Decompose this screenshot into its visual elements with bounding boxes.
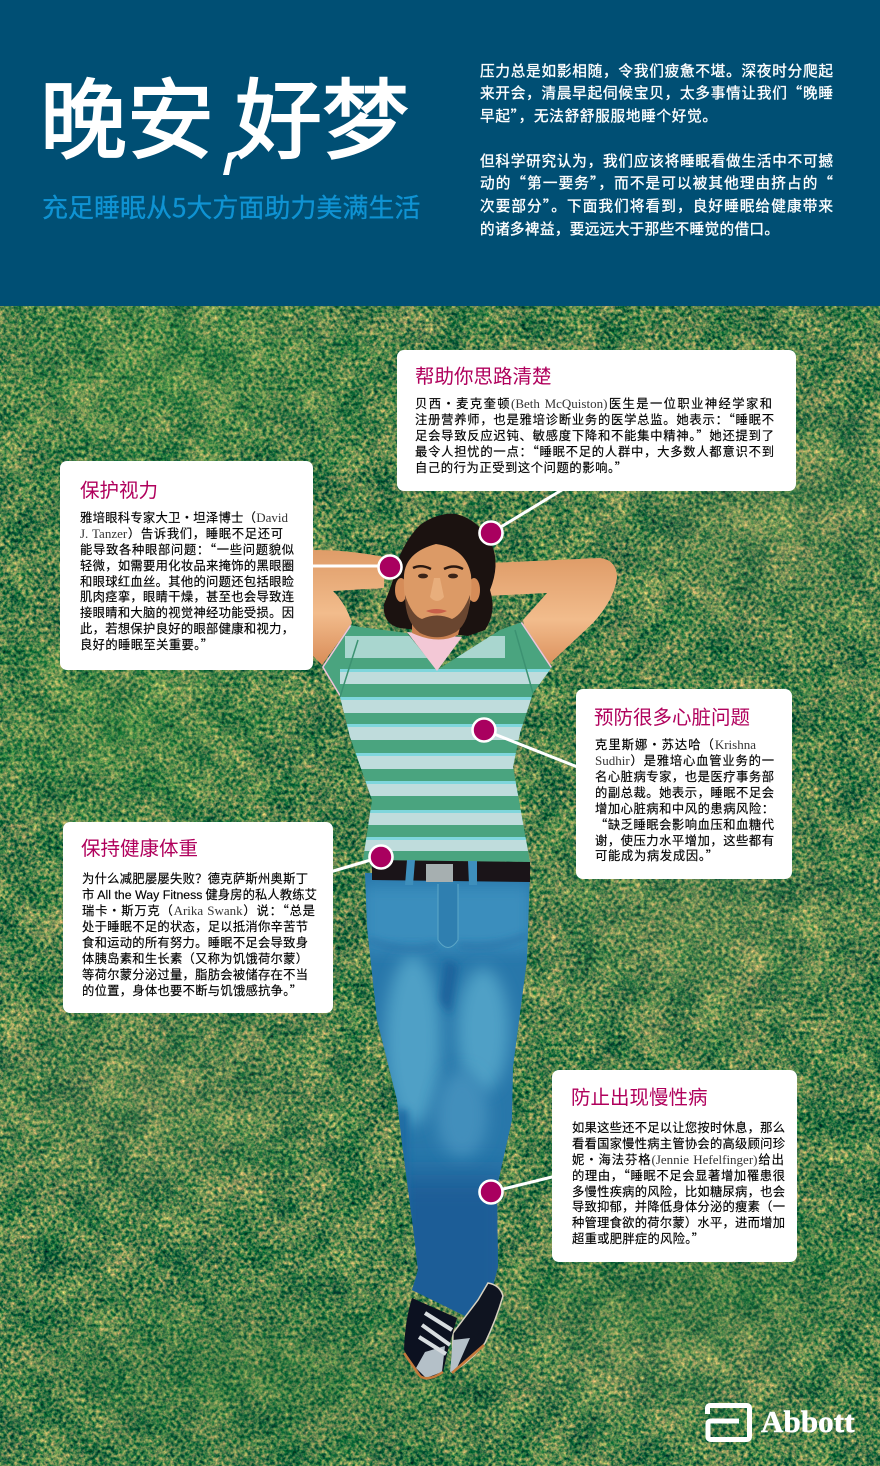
body text: clear thinking: [415, 394, 774, 476]
body text: healthy weight: 瑞卡·斯万克（Arika Swank）说：“总是: [82, 901, 315, 919]
right arm: [488, 558, 617, 670]
heading: clear thinking: 帮助你思路清楚: [415, 360, 552, 389]
body text: heart: 可能成为病发成因。”: [595, 846, 718, 864]
body text: chronic disease: 超重或肥胖症的风险。”: [572, 1229, 704, 1247]
body text: protect vision: 良好的睡眠至关重要。”: [80, 635, 213, 653]
body text: protect vision: 此，若想保护良好的眼部健康和视力，: [80, 619, 294, 637]
body text: healthy weight: 食和运动的所有努力。睡眠不足会导致身: [82, 933, 308, 951]
body text: heart: 克里斯娜·苏达哈（Krishna: [595, 735, 756, 753]
left arm: [313, 550, 384, 665]
panel: healthy weight: [63, 822, 333, 1013]
body text: clear thinking: 贝西·麦克奎顿(Beth McQuiston)医生是一位职业神经学家和: [415, 394, 772, 412]
man lying on the grass: [313, 514, 617, 1380]
undershirt collar: [407, 632, 462, 671]
marker: eyes: [378, 556, 402, 578]
logo: Abbott: [705, 1403, 855, 1442]
left shoe: [404, 1298, 484, 1379]
belt buckle: [426, 864, 453, 882]
panel: clear thinking: [397, 350, 796, 491]
body text: chronic disease: 看看国家慢性病主管协会的高级顾问珍: [572, 1134, 785, 1152]
body text: protect vision: 能导致各种眼部问题：“一些问题貌似: [80, 540, 294, 558]
body text: heart: 增加心脏病和中风的患病风险：: [595, 799, 774, 817]
body text: protect vision: J. Tanzer）告诉我们，睡眠不足还可: [80, 524, 283, 542]
body text: healthy weight: 的位置，身体也要不断与饥饿感抗争。”: [82, 981, 302, 999]
body text: protect vision: [80, 508, 294, 653]
body text: chronic disease: 如果这些还不足以让您按时休息，那么: [572, 1118, 785, 1136]
body text: chronic disease: 种管理食欲的荷尔蒙）水平，进而增加: [572, 1213, 785, 1231]
marker: heart: [472, 718, 496, 742]
body text: heart: “缺乏睡眠会影响血压和血糖代: [595, 815, 774, 833]
marker: weight: [370, 846, 392, 868]
body text: chronic disease: 的理由，“睡眠不足会显著增加罹患很: [572, 1166, 785, 1184]
marker: brain: [480, 522, 502, 544]
body text: protect vision: 和眼球红血丝。其他的问题还包括眼睑: [80, 572, 294, 590]
body text: healthy weight: 市 All the Way Fitness 健身房的私人教练艾: [82, 885, 317, 903]
marker: chronic disease: [480, 1180, 502, 1204]
intro text: 次要部分”。下面我们将看到，良好睡眠给健康带来: [480, 195, 833, 216]
panel: protect vision: [60, 461, 313, 670]
heading: heart: 预防很多心脏问题: [594, 701, 750, 730]
neck: [412, 620, 462, 640]
body text: chronic disease: [572, 1118, 785, 1247]
wordmark: Abbott: [761, 1404, 855, 1439]
intro text: 早起”，无法舒舒服服地睡个好觉。: [480, 105, 717, 126]
body text: protect vision: 肌肉痉挛，眼睛干燥，甚至也会导致连: [80, 587, 294, 605]
intro text: 来开会，清晨早起伺候宝贝，太多事情让我们“晚睡: [480, 82, 833, 103]
title: [40, 51, 409, 177]
body text: protect vision: 接眼睛和大脑的视觉神经功能受损。因: [80, 603, 294, 621]
right shoe: [452, 1283, 503, 1372]
body text: chronic disease: 导致抑郁，并降低身体分泌的瘦素（一: [572, 1197, 785, 1215]
body text: healthy weight: [82, 869, 317, 999]
title: 好梦: [235, 51, 409, 177]
body text: heart: [595, 735, 774, 864]
hair: [384, 514, 496, 636]
body text: chronic disease: 多慢性疾病的风险，比如糖尿病，也会: [572, 1182, 785, 1200]
jeans: [365, 872, 530, 1316]
body text: protect vision: 轻微，如需要用化妆品来掩饰的黑眼圈: [80, 556, 294, 574]
body text: clear thinking: 足会导致反应迟钝、敏感度下降和不能集中精神。”她还提到了: [415, 426, 774, 444]
heading: protect vision: 保护视力: [80, 474, 158, 503]
body text: healthy weight: 体胰岛素和生长素（又称为饥饿荷尔蒙）: [82, 949, 308, 967]
background: grass field: [0, 306, 880, 1466]
body text: heart: 谢，使压力水平增加，这些都有: [595, 831, 774, 849]
body text: clear thinking: 最令人担忧的一点：“睡眠不足的人群中，大多数人都意识不到: [415, 442, 774, 460]
body text: heart: 名心脏病专家，也是医疗事务部: [595, 767, 774, 785]
shirt: [322, 622, 552, 862]
panel: chronic disease: [552, 1070, 797, 1262]
body text: healthy weight: 等荷尔蒙分泌过量，脂肪会被储存在不当: [82, 965, 308, 983]
intro text: 压力总是如影相随，令我们疲惫不堪。深夜时分爬起: [480, 60, 833, 81]
subtitle: 充足睡眠从5大方面助力美满生活: [42, 188, 420, 225]
panel: heart: [576, 689, 792, 879]
header band: [0, 0, 880, 306]
body text: healthy weight: 处于睡眠不足的状态，足以抵消你辛苦节: [82, 917, 308, 935]
icon: Abbott mark: [705, 1403, 752, 1442]
body text: heart: 的副总裁。她表示，睡眠不足会: [595, 783, 774, 801]
body text: clear thinking: 注册营养师，也是雅培诊断业务的医学总监。她表示：“睡眠不: [415, 410, 774, 428]
belt loops: [405, 860, 477, 885]
belt: [372, 860, 530, 882]
body text: clear thinking: 自己的行为正受到这个问题的影响。”: [415, 458, 627, 476]
body text: protect vision: 雅培眼科专家大卫·坦泽博士（David: [80, 508, 288, 526]
heading: healthy weight: 保持健康体重: [81, 832, 198, 861]
body text: chronic disease: 妮·海法芬格(Jennie Hefelfinger)给出: [572, 1150, 784, 1168]
intro text: [480, 60, 833, 239]
face: [395, 544, 480, 637]
body text: healthy weight: 为什么减肥屡屡失败？德克萨斯州奥斯丁: [82, 869, 308, 887]
title: 晚安: [40, 51, 214, 177]
heading: chronic disease: 防止出现慢性病: [571, 1081, 708, 1110]
intro text: 动的“第一要务”，而不是可以被其他理由挤占的“: [480, 172, 833, 193]
intro text: 的诸多裨益，要远远大于那些不睡觉的借口。: [480, 218, 779, 239]
intro text: 但科学研究认为，我们应该将睡眠看做生活中不可撼: [480, 150, 833, 171]
body text: heart: Sudhir）是雅培心血管业务的一: [595, 751, 774, 769]
